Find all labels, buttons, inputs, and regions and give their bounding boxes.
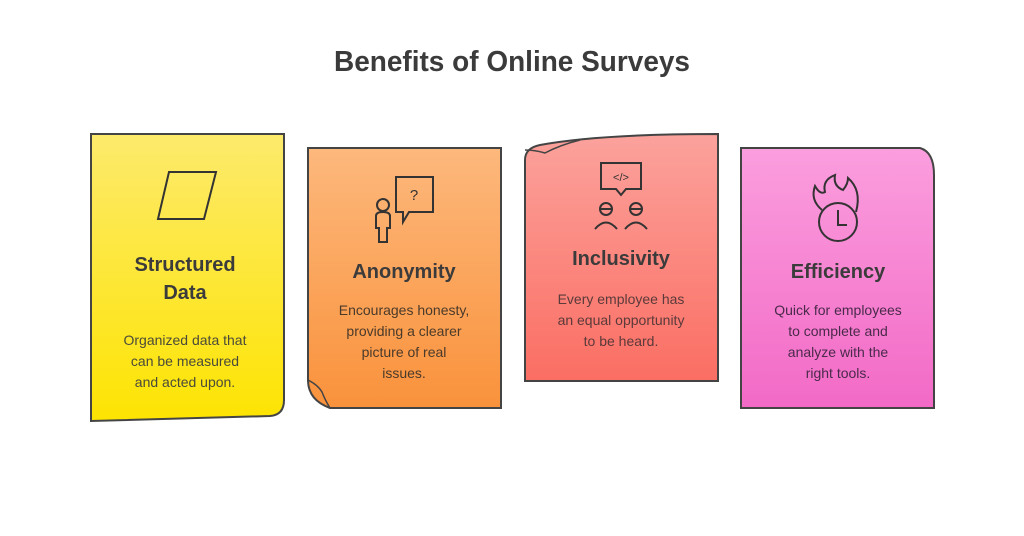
heading: structured data: Data: [163, 282, 208, 304]
heading: efficiency: Efficiency: [791, 261, 886, 283]
panel: inclusivity: </>: [613, 172, 629, 184]
icon: two people with code bubble: [595, 163, 647, 229]
text: anonymity: providing a clearer: [346, 323, 462, 339]
text: structured data: Organized data that: [124, 332, 247, 348]
icon: flaming clock: [814, 175, 858, 241]
text: efficiency: analyze with the: [788, 344, 888, 360]
icon: parallelogram: [158, 172, 216, 219]
panel: efficiency: [741, 148, 934, 408]
text: inclusivity: an equal opportunity: [558, 312, 684, 328]
text: inclusivity: to be heard.: [584, 333, 658, 349]
heading: structured data: Structured: [134, 254, 236, 276]
text: inclusivity: Every employee has: [558, 291, 684, 307]
icon: person with question: [376, 177, 433, 242]
text: structured data: can be measured: [131, 353, 239, 369]
panel: structured data: [91, 134, 284, 421]
heading: anonymity: Anonymity: [352, 261, 457, 283]
text: efficiency: right tools.: [806, 365, 870, 381]
text: efficiency: Quick for employees: [774, 302, 902, 318]
text: anonymity: picture of real: [362, 344, 446, 360]
panel: anonymity: ?: [410, 187, 418, 204]
heading: inclusivity: Inclusivity: [572, 248, 671, 270]
title: Benefits of Online Surveys: [334, 46, 690, 78]
panel: inclusivity: [525, 134, 718, 381]
text: structured data: and acted upon.: [135, 374, 235, 390]
text: anonymity: issues.: [382, 365, 426, 381]
panel: anonymity: [308, 148, 501, 408]
text: anonymity: Encourages honesty,: [339, 302, 469, 318]
text: efficiency: to complete and: [788, 323, 888, 339]
